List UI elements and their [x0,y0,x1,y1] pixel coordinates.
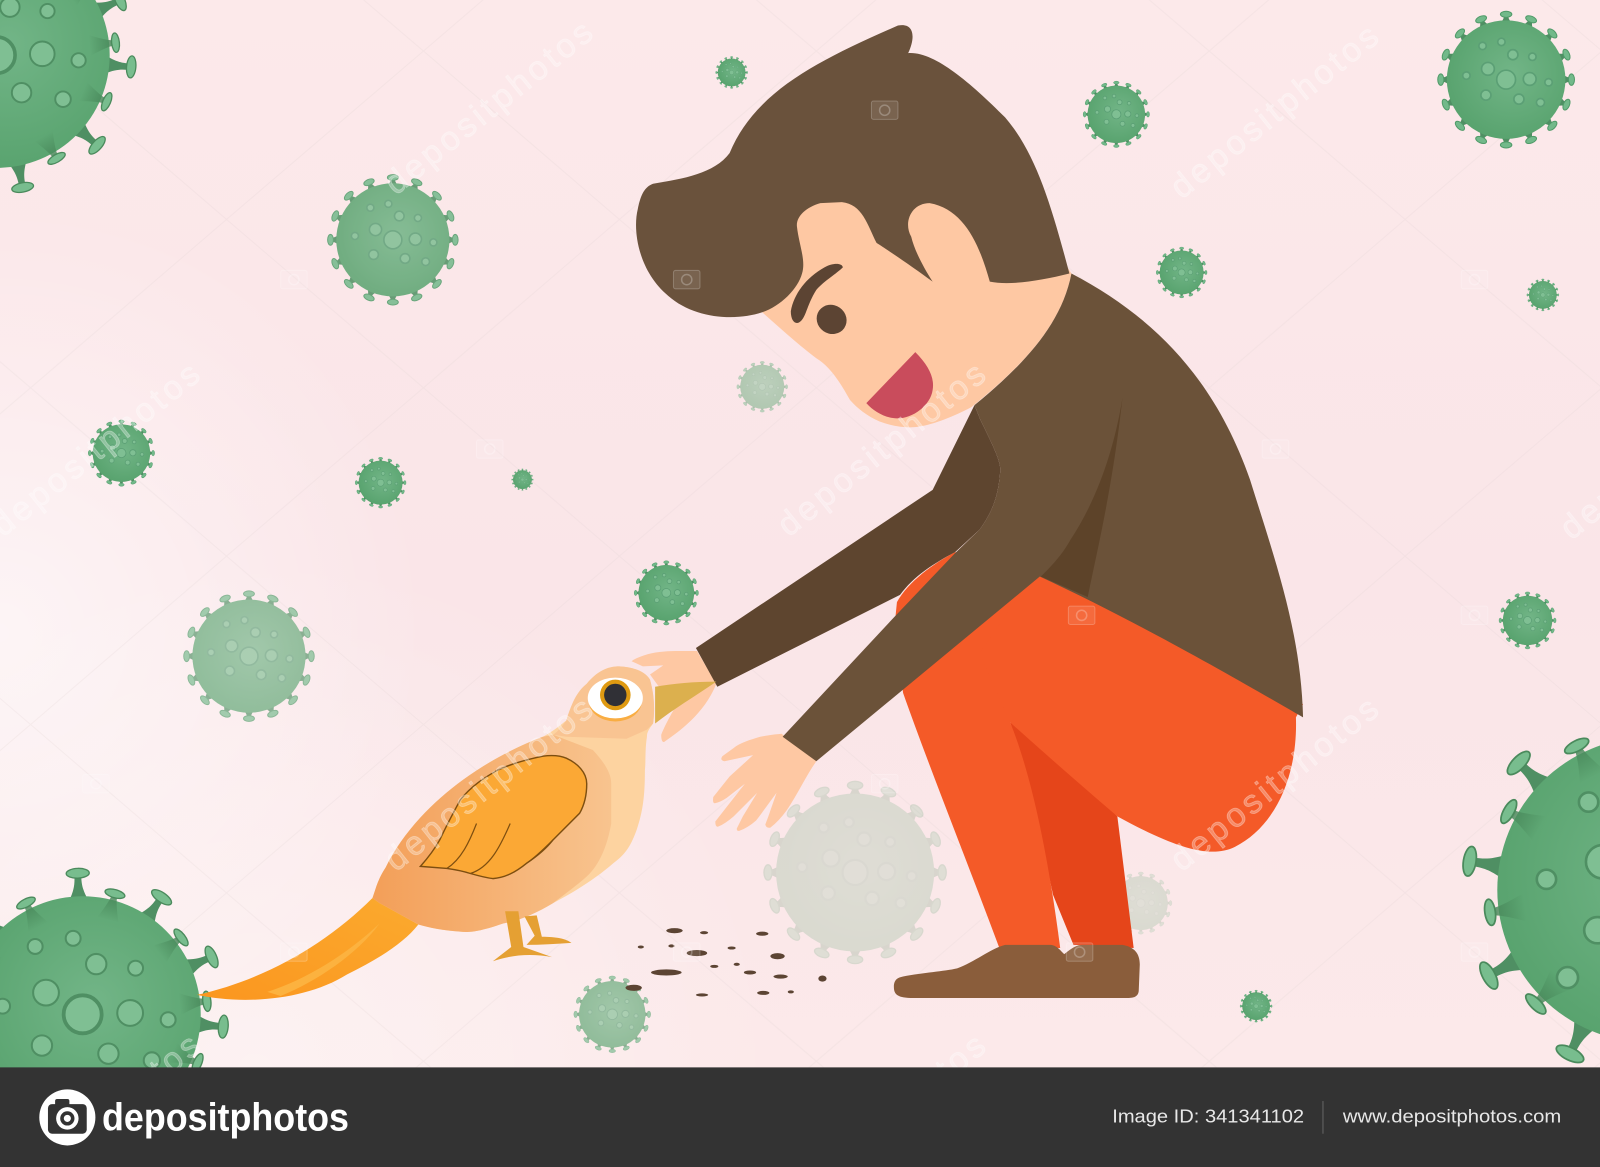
face [762,194,1071,427]
virus: faded large below hand [764,781,946,964]
watermarks: depositphotos [771,356,993,544]
watermarks: depositphotos [378,14,600,202]
legs [493,911,571,961]
wing feathers [447,824,553,874]
virus: small far right [1527,279,1559,311]
head [553,666,654,739]
virus: above hand [634,561,698,625]
virus: pale left [184,591,314,721]
mouth [866,352,933,418]
body shading [372,735,611,932]
virus: top left large [0,0,137,194]
pants: front leg with back sliver [895,552,1060,948]
virus: top right of head [1083,81,1149,147]
watermarks: depositphotos [1164,690,1386,879]
virus: upper left of centre [328,175,458,305]
body silhouette (chest tone) [372,666,654,932]
seeds on the ground [626,928,827,996]
virus: top right [1438,11,1574,148]
beak [655,682,716,724]
eye [588,678,643,721]
wing [420,756,587,879]
logo icon [39,1089,95,1145]
sweater body and front arm [783,274,1303,761]
pants: hip and thigh [980,566,1303,852]
tail [197,898,418,1000]
website: www.depositphotos.com [1342,1105,1561,1126]
virus: bottom left large [0,868,229,1160]
sweater fold [1041,398,1122,597]
virus: small right of head [1156,247,1207,298]
watermarks: depositphotos [378,690,600,879]
pants: rear leg [1010,714,1134,948]
footer bar [0,1067,1600,1167]
virus: tiny centre [512,469,533,490]
man [632,25,1303,998]
virus: right edge large [1461,701,1600,1078]
bird [197,666,716,1000]
virus: small bottom right [1240,990,1272,1022]
virus: left middle [88,420,155,486]
hair [636,25,1069,317]
front hand [713,734,816,831]
virus: right middle [1499,592,1556,649]
logo wordmark: depositphotos [102,1097,349,1140]
eyebrow [791,264,843,323]
watermarks: depositphotos [1164,18,1386,206]
virus: faded behind man's leg [1110,872,1172,934]
back hand [632,651,716,742]
virus: pale bottom [574,976,651,1053]
watermark camera icons [83,101,1488,961]
virus: small top centre [716,56,748,89]
eye [811,299,852,340]
shoe [894,945,1140,998]
virus: pale near face [737,361,788,412]
image id: Image ID: 341341102 [1112,1105,1304,1126]
virus: centre left small [355,457,406,508]
back arm [696,405,1000,687]
